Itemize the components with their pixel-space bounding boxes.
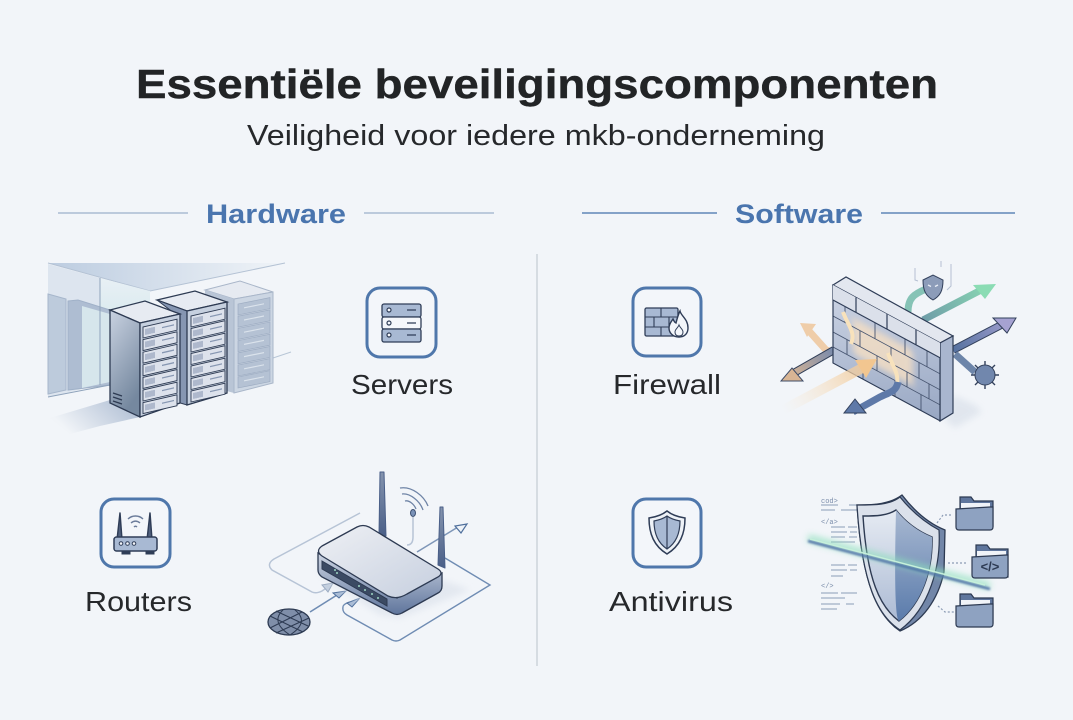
router body <box>318 553 442 614</box>
icon: routers <box>101 499 170 567</box>
folder top <box>956 497 993 530</box>
label: Antivirus: Antivirus <box>609 586 733 617</box>
antenna front <box>438 507 445 568</box>
shield <box>857 495 945 631</box>
icon: threat shield <box>915 261 951 300</box>
arrow: rejected tan up <box>809 331 834 352</box>
folder middle with code symbol <box>972 545 1008 578</box>
illustration: server room <box>48 263 291 434</box>
arrow: blue deflected <box>853 382 898 412</box>
globe <box>268 609 310 635</box>
brick wall <box>833 277 953 421</box>
heading: Hardware: Hardware <box>206 199 346 229</box>
illustration: shield with code and folders <box>808 495 1008 631</box>
title: Essentiële beveiligingscomponenten <box>136 61 938 107</box>
icon: antivirus <box>633 499 701 567</box>
icon: virus <box>971 361 999 389</box>
code lines <box>821 498 857 609</box>
code lines: cod> <box>821 498 838 506</box>
illustration: firewall wall with arrows <box>781 261 1016 428</box>
arrow: allowed green <box>923 288 985 320</box>
arrow: purple <box>953 323 1005 350</box>
icon: firewall <box>633 288 701 356</box>
scan beam <box>808 538 990 589</box>
label: Firewall: Firewall <box>613 369 721 400</box>
wifi signal <box>400 488 428 516</box>
front server rack <box>110 301 180 417</box>
antenna back <box>379 472 386 536</box>
dotted connectors <box>937 515 968 612</box>
folder middle with code symbol: </> <box>981 559 1000 574</box>
arrow: rejected tan left <box>792 350 834 374</box>
heading: Software: Software <box>735 199 863 229</box>
code lines: </a> <box>821 519 838 527</box>
icon: servers <box>367 288 436 357</box>
label: Servers: Servers <box>351 369 453 400</box>
folder bottom <box>956 594 993 627</box>
back server rack <box>205 281 273 393</box>
code lines: </> <box>821 583 834 591</box>
network cables <box>269 513 360 593</box>
arrows into router <box>322 583 333 592</box>
subtitle: Veiligheid voor iedere mkb-onderneming <box>247 120 825 152</box>
arrow: incoming orange <box>783 365 868 410</box>
middle server rack <box>157 291 227 405</box>
center divider <box>536 254 538 666</box>
label: Routers: Routers <box>85 586 192 617</box>
illustration: router <box>268 472 490 641</box>
